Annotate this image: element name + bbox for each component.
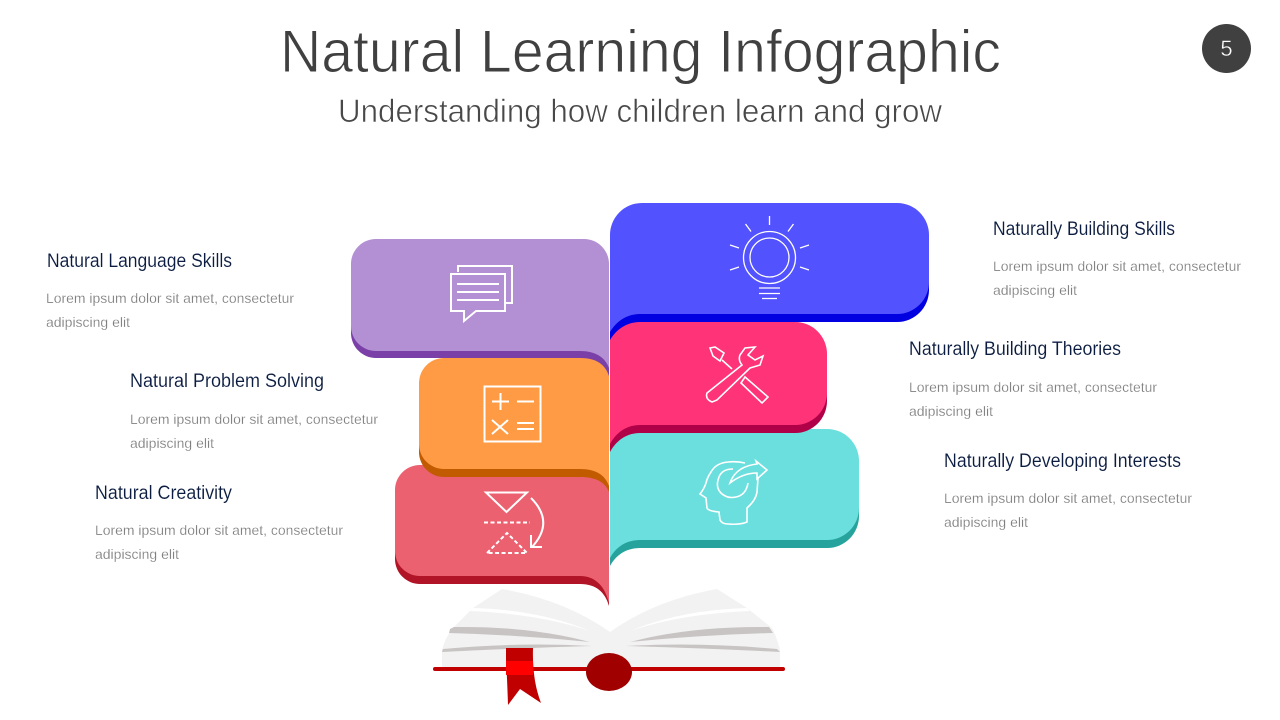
- text block: naturally building theories: Lorem ipsum dolor sit amet, consectetur: [909, 379, 1157, 395]
- page number badge: [1202, 24, 1251, 73]
- text block: natural problem solving: adipiscing elit: [130, 435, 214, 451]
- panel: teal bubble: [610, 429, 859, 566]
- title: Natural Learning Infographic: [280, 18, 1001, 85]
- text block: naturally building theories: [909, 339, 1157, 419]
- subtitle: Understanding how children learn and grow: [338, 93, 943, 129]
- icon: crossed tools: [707, 347, 768, 403]
- text block: naturally developing interests: Naturally Developing Interests: [944, 451, 1181, 472]
- text block: natural creativity: Natural Creativity: [95, 483, 232, 504]
- text block: natural problem solving: [130, 371, 378, 451]
- text block: naturally building skills: adipiscing elit: [993, 282, 1077, 298]
- text block: naturally developing interests: [944, 451, 1192, 530]
- text block: natural problem solving: Lorem ipsum dolor sit amet, consectetur: [130, 411, 378, 427]
- text block: naturally developing interests: adipiscing elit: [944, 514, 1028, 530]
- text block: naturally building skills: [993, 219, 1241, 298]
- icon: light bulb: [730, 216, 809, 298]
- icon: head with arrow: [700, 461, 767, 524]
- text block: naturally building theories: Naturally Building Theories: [909, 339, 1121, 360]
- panel: orange bubble: [419, 358, 609, 492]
- bookmark ribbon: [506, 648, 541, 705]
- text block: natural creativity: adipiscing elit: [95, 546, 179, 562]
- icon: calculator symbols: [484, 386, 540, 442]
- panel: purple bubble: [351, 239, 609, 376]
- book pages: [442, 589, 780, 668]
- text block: naturally developing interests: Lorem ipsum dolor sit amet, consectetur: [944, 490, 1192, 506]
- text block: natural problem solving: Natural Problem Solving: [130, 371, 324, 392]
- panel: pink bubble: [610, 322, 827, 452]
- text block: naturally building theories: adipiscing elit: [909, 403, 993, 419]
- text block: natural language skills: Lorem ipsum dolor sit amet, consectetur: [46, 290, 294, 306]
- panel: blue bubble: [610, 203, 929, 340]
- text block: naturally building skills: Lorem ipsum dolor sit amet, consectetur: [993, 258, 1241, 274]
- text block: natural language skills: adipiscing elit: [46, 314, 130, 330]
- text block: natural language skills: [46, 251, 294, 330]
- text block: natural language skills: Natural Language Skills: [47, 251, 232, 272]
- text block: natural creativity: Lorem ipsum dolor sit amet, consectetur: [95, 522, 343, 538]
- text block: naturally building skills: Naturally Building Skills: [993, 219, 1175, 240]
- panel: red bubble: [395, 465, 609, 606]
- book cover line: [433, 667, 785, 671]
- text block: natural creativity: [95, 483, 343, 562]
- page number badge: 5: [1220, 36, 1233, 61]
- icon: triangle reflection: [484, 492, 543, 553]
- spine seal: [586, 653, 632, 691]
- icon: speech bubbles: [451, 266, 512, 321]
- book: [433, 589, 785, 705]
